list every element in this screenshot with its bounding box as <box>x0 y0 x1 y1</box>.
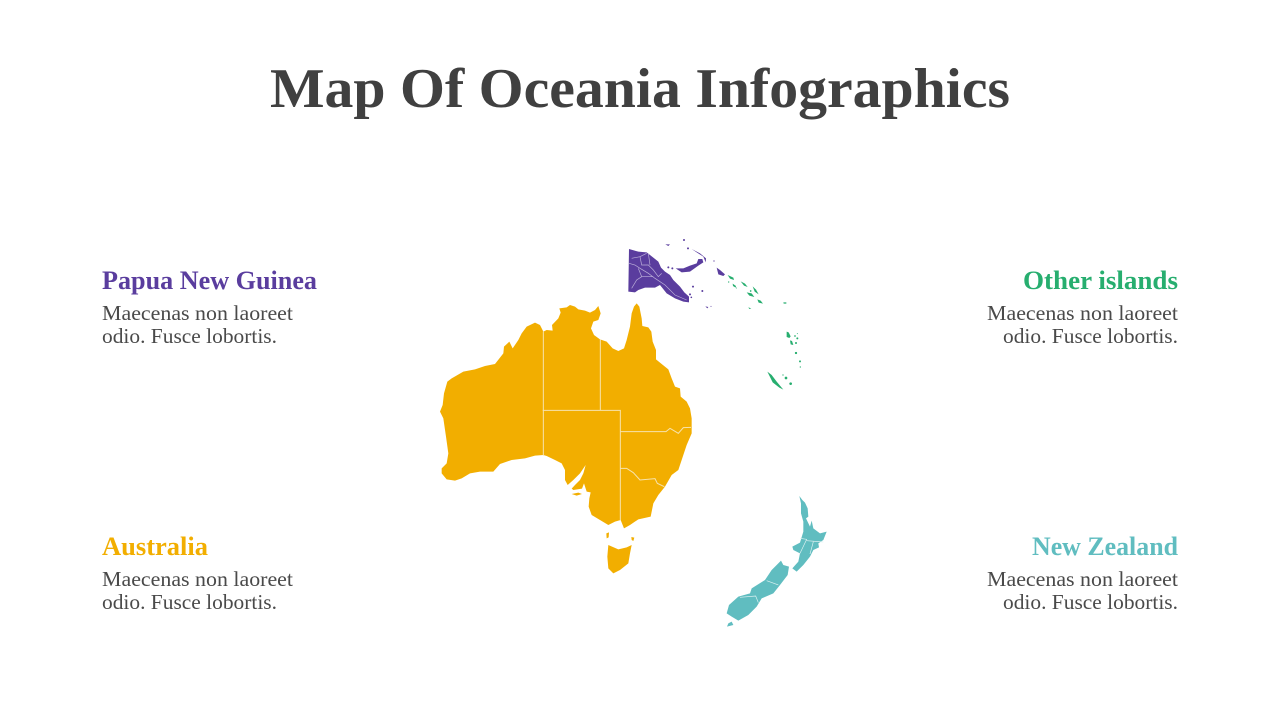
title: Map Of Oceania Infographics <box>270 58 1010 120</box>
map: Other islands <box>728 275 801 390</box>
icon: Tasmania <box>607 545 632 573</box>
text block: Other islands description <box>987 301 1178 348</box>
region borders <box>740 538 823 603</box>
province borders <box>629 253 687 300</box>
text block: Other islands description: Maecenas non laoreet <box>987 301 1178 325</box>
text block: Australia description <box>102 567 293 614</box>
heading: Papua New Guinea: Papua New Guinea <box>102 266 317 295</box>
panel: Papua New Guinea <box>102 266 317 348</box>
heading: New Zealand: New Zealand <box>1032 532 1179 561</box>
text block: Papua New Guinea description: odio. Fusce lobortis. <box>102 324 277 348</box>
text block: Papua New Guinea description: Maecenas non laoreet <box>102 301 293 325</box>
text block: Australia description: Maecenas non laoreet <box>102 567 293 591</box>
text block: New Zealand description: Maecenas non laoreet <box>987 567 1178 591</box>
text block: New Zealand description <box>987 567 1178 614</box>
text block: Other islands description: odio. Fusce lobortis. <box>1003 324 1178 348</box>
text block: New Zealand description: odio. Fusce lobortis. <box>1003 590 1178 614</box>
heading: Australia: Australia <box>102 532 208 561</box>
text block: Australia description: odio. Fusce lobortis. <box>102 590 277 614</box>
state borders <box>543 332 691 520</box>
panel: Other islands <box>987 266 1178 348</box>
panel: Australia <box>102 532 293 614</box>
text block: Papua New Guinea description <box>102 301 293 348</box>
panel: New Zealand <box>987 532 1179 614</box>
map: Australia <box>440 303 692 573</box>
heading: Other islands: Other islands <box>1023 266 1178 295</box>
map: New Zealand <box>727 496 827 627</box>
map: Papua New Guinea <box>628 239 725 308</box>
